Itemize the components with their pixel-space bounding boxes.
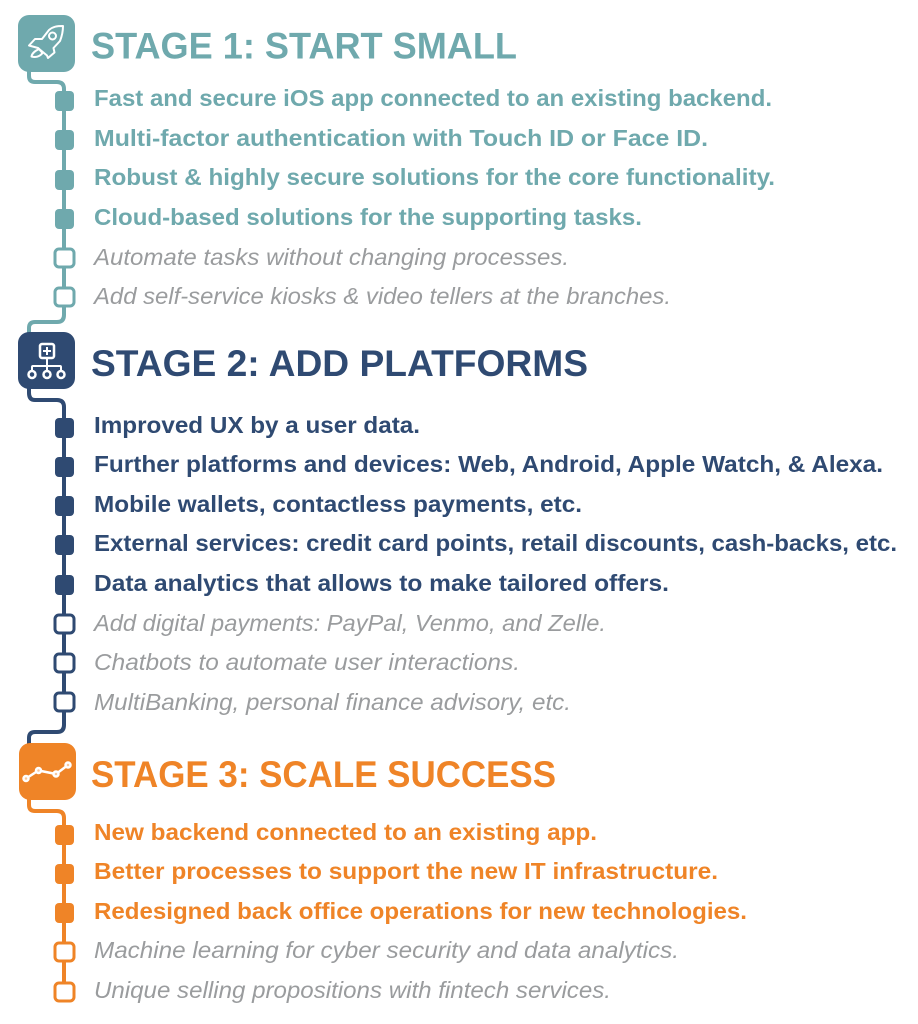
icon: flowchart bbox=[18, 332, 75, 389]
stage 1 item list: Cloud-based solutions for the supporting tasks. bbox=[94, 204, 642, 230]
stage 3 item list bbox=[94, 819, 747, 1003]
stage 2 item list: External services: credit card points, retail discounts, cash-backs, etc. bbox=[94, 530, 897, 556]
stage 3 item list: Better processes to support the new IT infrastructure. bbox=[94, 858, 718, 884]
stage 1 item list: Automate tasks without changing processes. bbox=[92, 244, 569, 270]
heading: stage 3: STAGE 3: SCALE SUCCESS bbox=[91, 754, 556, 795]
stage 1 item list bbox=[92, 85, 775, 309]
stage 2 item list: Further platforms and devices: Web, Android, Apple Watch, & Alexa. bbox=[94, 451, 883, 477]
stage 3 item list: Redesigned back office operations for new technologies. bbox=[94, 898, 747, 924]
stage 2 item list: Chatbots to automate user interactions. bbox=[94, 649, 520, 675]
stage 2 item list: Mobile wallets, contactless payments, etc. bbox=[94, 491, 582, 517]
stage 2 item list: Improved UX by a user data. bbox=[94, 412, 420, 438]
stage 1 item list: Robust & highly secure solutions for the core functionality. bbox=[94, 164, 775, 190]
stage 1 item list: Multi-factor authentication with Touch ID or Face ID. bbox=[94, 125, 708, 151]
stage 2 item list bbox=[92, 412, 897, 715]
icon: rocket bbox=[18, 15, 75, 72]
heading: stage 2: STAGE 2: ADD PLATFORMS bbox=[91, 343, 588, 384]
stage 3 timeline bbox=[29, 798, 74, 1001]
stage 2 item list: Add digital payments: PayPal, Venmo, and Zelle. bbox=[92, 610, 606, 636]
stage 1 item list: Add self-service kiosks & video tellers at the branches. bbox=[92, 283, 671, 309]
stage 1 item list: Fast and secure iOS app connected to an existing backend. bbox=[94, 85, 772, 111]
stage 2 item list: MultiBanking, personal finance advisory, etc. bbox=[94, 689, 571, 715]
heading: stage 1: STAGE 1: START SMALL bbox=[91, 26, 517, 66]
stage 3 item list: Machine learning for cyber security and data analytics. bbox=[94, 937, 679, 963]
stage 3 item list: New backend connected to an existing app. bbox=[94, 819, 597, 845]
stage 2 timeline bbox=[29, 387, 74, 746]
icon: line chart bbox=[19, 743, 76, 800]
stage 1 timeline bbox=[29, 70, 74, 334]
stage 3 item list: Unique selling propositions with fintech services. bbox=[94, 977, 611, 1003]
stage 2 item list: Data analytics that allows to make tailored offers. bbox=[94, 570, 669, 596]
